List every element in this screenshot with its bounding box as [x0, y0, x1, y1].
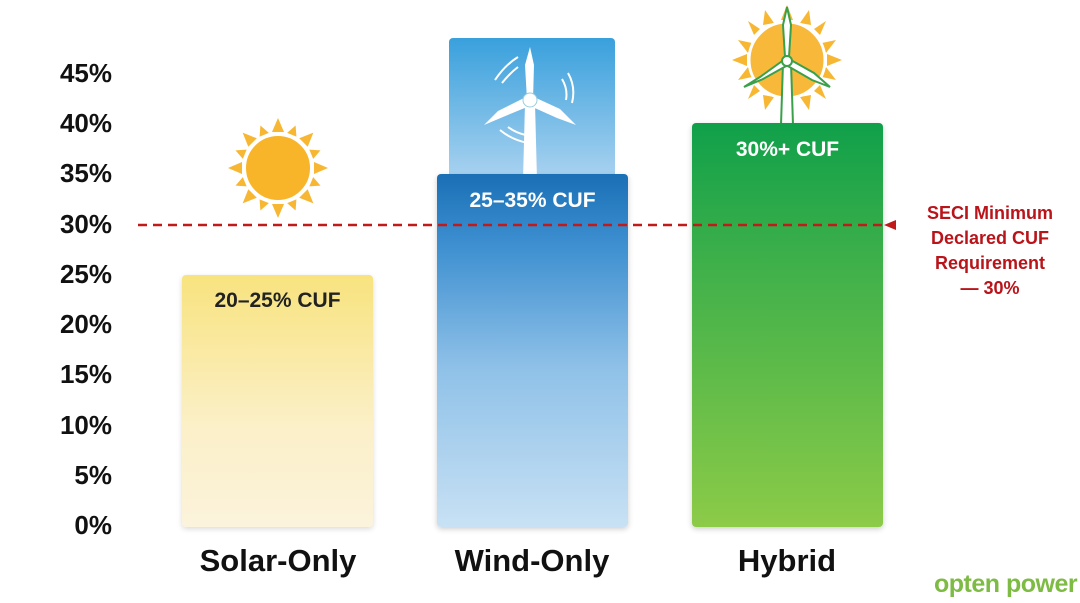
y-axis labels: 0%: [74, 510, 112, 540]
y-axis labels: 5%: [74, 460, 112, 490]
bar: solar-only: [182, 275, 373, 527]
y-axis labels: 40%: [60, 108, 112, 138]
y-axis labels: 35%: [60, 158, 112, 188]
callout: SECI requirement: SECI Minimum: [927, 203, 1053, 223]
y-axis labels: 25%: [60, 259, 112, 289]
y-axis labels: 30%: [60, 209, 112, 239]
logo: opten power: opten power: [934, 570, 1077, 598]
category labels: Solar-Only: [200, 543, 356, 578]
bar: solar-only: 20–25% CUF: [214, 289, 341, 312]
arrow: SECI 30% dashed line: [138, 220, 896, 230]
y-axis labels: 20%: [60, 309, 112, 339]
icon: sun: [228, 118, 328, 218]
icon: hybrid sun and turbine: [732, 5, 842, 123]
bar: wind upper box: [449, 38, 615, 178]
callout: SECI requirement: Requirement: [935, 253, 1045, 273]
y-axis labels: 15%: [60, 359, 112, 389]
icon: wind turbine: [484, 47, 576, 174]
bar: hybrid: [692, 123, 883, 527]
bar: hybrid: 30%+ CUF: [736, 138, 839, 161]
category labels: Wind-Only: [455, 543, 609, 578]
callout: SECI requirement: — 30%: [960, 278, 1020, 298]
bar: wind-only: [437, 174, 628, 527]
y-axis labels: [60, 58, 112, 540]
category labels: [200, 543, 836, 578]
y-axis labels: 45%: [60, 58, 112, 88]
callout: SECI requirement: Declared CUF: [931, 228, 1049, 248]
y-axis labels: 10%: [60, 410, 112, 440]
bar: wind-only: 25–35% CUF: [469, 189, 596, 212]
category labels: Hybrid: [738, 543, 836, 578]
callout: SECI requirement: [927, 203, 1053, 298]
